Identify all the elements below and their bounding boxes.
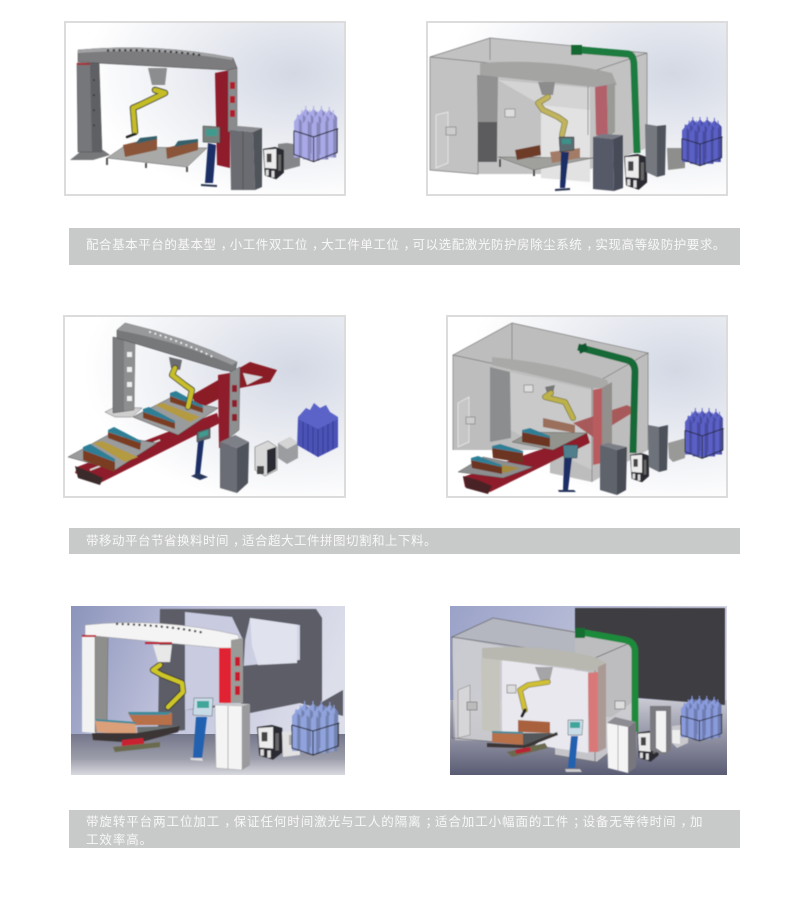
tall cabinet <box>645 124 666 177</box>
white electrical cabinet <box>215 703 250 770</box>
workpieces <box>471 418 575 474</box>
electrical cabinet <box>600 443 627 495</box>
caption bar: rotary platform: 带旋转平台两工位加工 ，保证任何时间激光与工人的隔离 ；适合加工小幅面的工件 ；设备无等待时间 ，加 <box>86 815 703 829</box>
moving platforms <box>68 398 218 470</box>
panel: rotary platform with protective enclosure <box>450 606 727 775</box>
chiller box <box>278 437 298 464</box>
control console <box>190 698 213 761</box>
robot arm <box>538 97 565 135</box>
electrical cabinet <box>593 134 623 191</box>
caption bar: rotary platform <box>69 810 740 848</box>
green dust duct <box>575 628 635 732</box>
gantry <box>481 647 606 752</box>
laser source unit <box>263 147 284 179</box>
gas cylinders <box>685 408 724 458</box>
chiller box <box>282 731 300 757</box>
gantry <box>490 357 612 465</box>
panel: basic platform with protective enclosure <box>426 21 728 196</box>
left column <box>105 337 142 417</box>
white gantry beam <box>82 623 242 648</box>
laser source unit <box>630 453 649 482</box>
gas cylinders <box>292 701 339 755</box>
enclosure walls <box>430 38 647 182</box>
enclosure walls <box>452 618 632 762</box>
left column <box>70 63 110 160</box>
tall cabinet <box>648 425 668 472</box>
robot arm <box>153 645 183 707</box>
right column <box>218 367 240 448</box>
control console <box>191 428 210 480</box>
gantry beam <box>78 48 237 70</box>
white electrical cabinet <box>607 717 636 773</box>
rotary table with workpieces <box>92 712 180 752</box>
control console <box>565 720 583 772</box>
chiller box <box>278 143 300 170</box>
laser source unit <box>637 731 659 762</box>
gas cylinders <box>681 696 722 741</box>
control console <box>555 137 574 191</box>
caption bar: moving platform <box>69 528 740 554</box>
robot arm <box>520 682 548 716</box>
caption bar: basic type: 配合基本平台的基本型 ，小工件双工位 ，大工件单工位 ，可以选配激光防护房除尘系统 ，实现高等级防护要求。 <box>86 238 726 252</box>
chiller box <box>668 438 686 462</box>
gas cylinders <box>294 106 338 162</box>
caption bar: moving platform: 带移动平台节省换料时间 ，适合超大工件拼图切割和上下料。 <box>86 534 437 548</box>
panel: basic platform gantry station <box>64 21 346 196</box>
robot arm <box>127 68 167 137</box>
enclosure walls <box>453 323 648 482</box>
right column <box>215 68 237 168</box>
gantry shadow on wall <box>158 609 343 733</box>
red rails <box>75 362 277 485</box>
tall frame cabinet <box>650 706 671 755</box>
laser source unit <box>255 441 277 476</box>
worktable with two workpieces <box>107 136 207 172</box>
control console <box>558 445 578 492</box>
panel: rotary platform station <box>71 606 345 775</box>
robot arm <box>169 357 192 407</box>
dark back wall <box>575 608 725 717</box>
red rails <box>463 405 637 494</box>
panel: moving platform with protective enclosure <box>446 315 728 498</box>
caption bar: basic type <box>69 228 740 265</box>
green dust duct <box>571 45 637 153</box>
control console <box>201 126 220 187</box>
electrical cabinet <box>220 435 249 493</box>
gantry beam <box>117 323 237 372</box>
chiller box <box>667 148 685 170</box>
workpieces <box>83 391 203 472</box>
gas cylinders <box>682 117 722 166</box>
green dust duct <box>578 343 635 453</box>
white gantry left column <box>82 635 108 733</box>
worktable with workpieces <box>498 145 593 176</box>
laser source unit <box>624 154 647 190</box>
panel: moving platform station <box>63 315 346 498</box>
robot arm <box>545 393 573 418</box>
rotary table with workpieces <box>487 720 558 757</box>
right column <box>219 638 243 703</box>
moving platforms <box>458 432 587 478</box>
caption bar: rotary platform: 工效率高。 <box>86 833 153 847</box>
laser source unit <box>257 725 282 760</box>
electrical cabinet <box>230 126 262 190</box>
gas cylinders <box>297 403 338 457</box>
chiller box <box>672 724 689 748</box>
gantry <box>477 62 617 162</box>
